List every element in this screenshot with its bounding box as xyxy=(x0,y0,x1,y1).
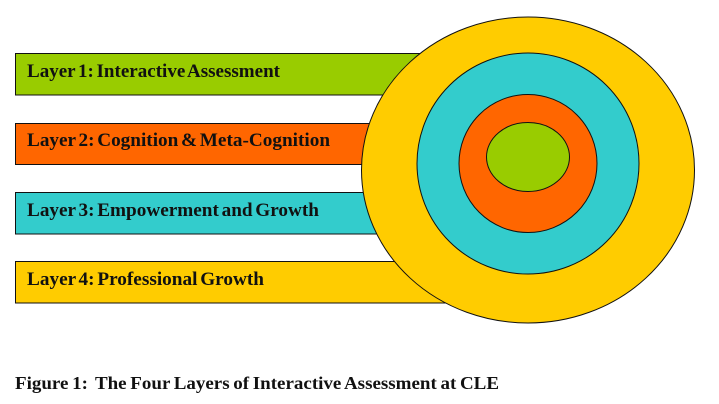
bar: layer 1 xyxy=(16,54,456,95)
bar: layer 2: Layer 2: Cognition & Meta-Cognition xyxy=(27,131,331,151)
ring: layer 4 xyxy=(362,17,694,323)
bar: layer 4 xyxy=(16,262,456,303)
ring: layer 3 xyxy=(417,53,639,274)
figure caption: Figure 1: The Four Layers of Interactive Assessment at CLE xyxy=(15,373,499,393)
bar: layer 3 xyxy=(16,192,456,234)
concentric circles diagram xyxy=(362,17,694,323)
bar: layer 1: Layer 1: Interactive Assessment xyxy=(27,62,281,82)
bar: layer 3: Layer 3: Empowerment and Growth xyxy=(27,201,320,221)
bar: layer 4: Layer 4: Professional Growth xyxy=(27,270,265,290)
ring: layer 2 xyxy=(459,94,597,232)
bar: layer 2 xyxy=(16,124,456,164)
core: layer 1 xyxy=(486,122,570,192)
